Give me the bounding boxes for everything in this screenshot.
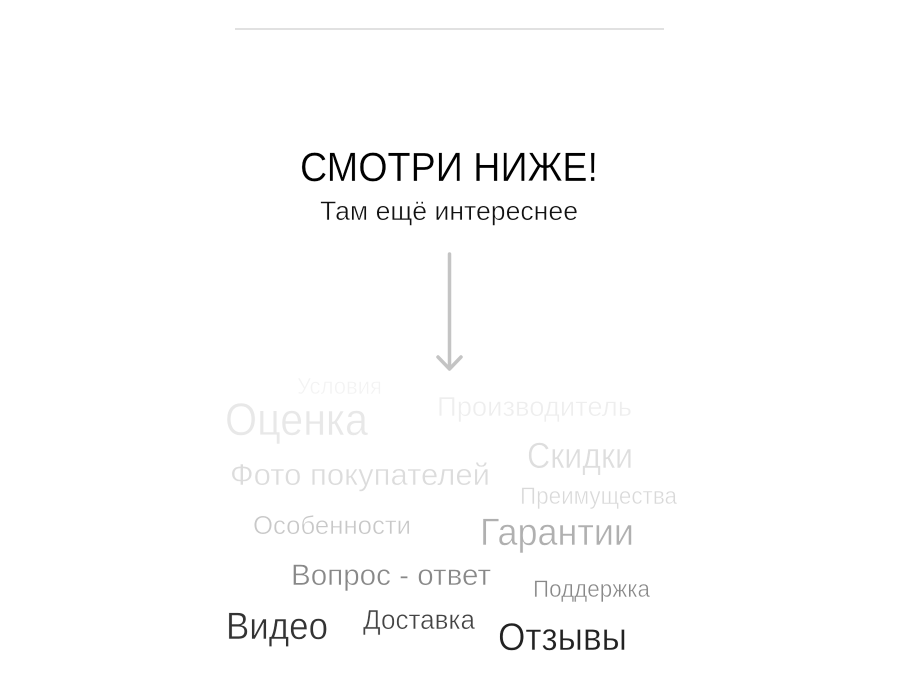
word: Видео: Видео [226, 606, 328, 648]
word: Отзывы: Отзывы [498, 616, 627, 659]
word: Производитель: Производитель [437, 391, 632, 422]
word cloud [225, 373, 678, 659]
word: Скидки: Скидки [527, 435, 633, 476]
word: Доставка: Доставка [363, 604, 475, 635]
word: Фото покупателей: Фото покупателей [230, 457, 490, 492]
icon: down arrow [438, 254, 461, 369]
word: Особенности: Особенности [253, 510, 411, 540]
word: Условия: Условия [297, 373, 382, 399]
word: Оценка: Оценка [225, 394, 369, 445]
title: СМОТРИ НИЖЕ! [300, 144, 598, 190]
word: Поддержка: Поддержка [533, 576, 651, 603]
word: Вопрос - ответ: Вопрос - ответ [291, 559, 491, 592]
subtitle: Там ещё интереснее [320, 196, 578, 226]
word: Гарантии: Гарантии [480, 512, 634, 554]
word: Преимущества: Преимущества [520, 483, 678, 510]
